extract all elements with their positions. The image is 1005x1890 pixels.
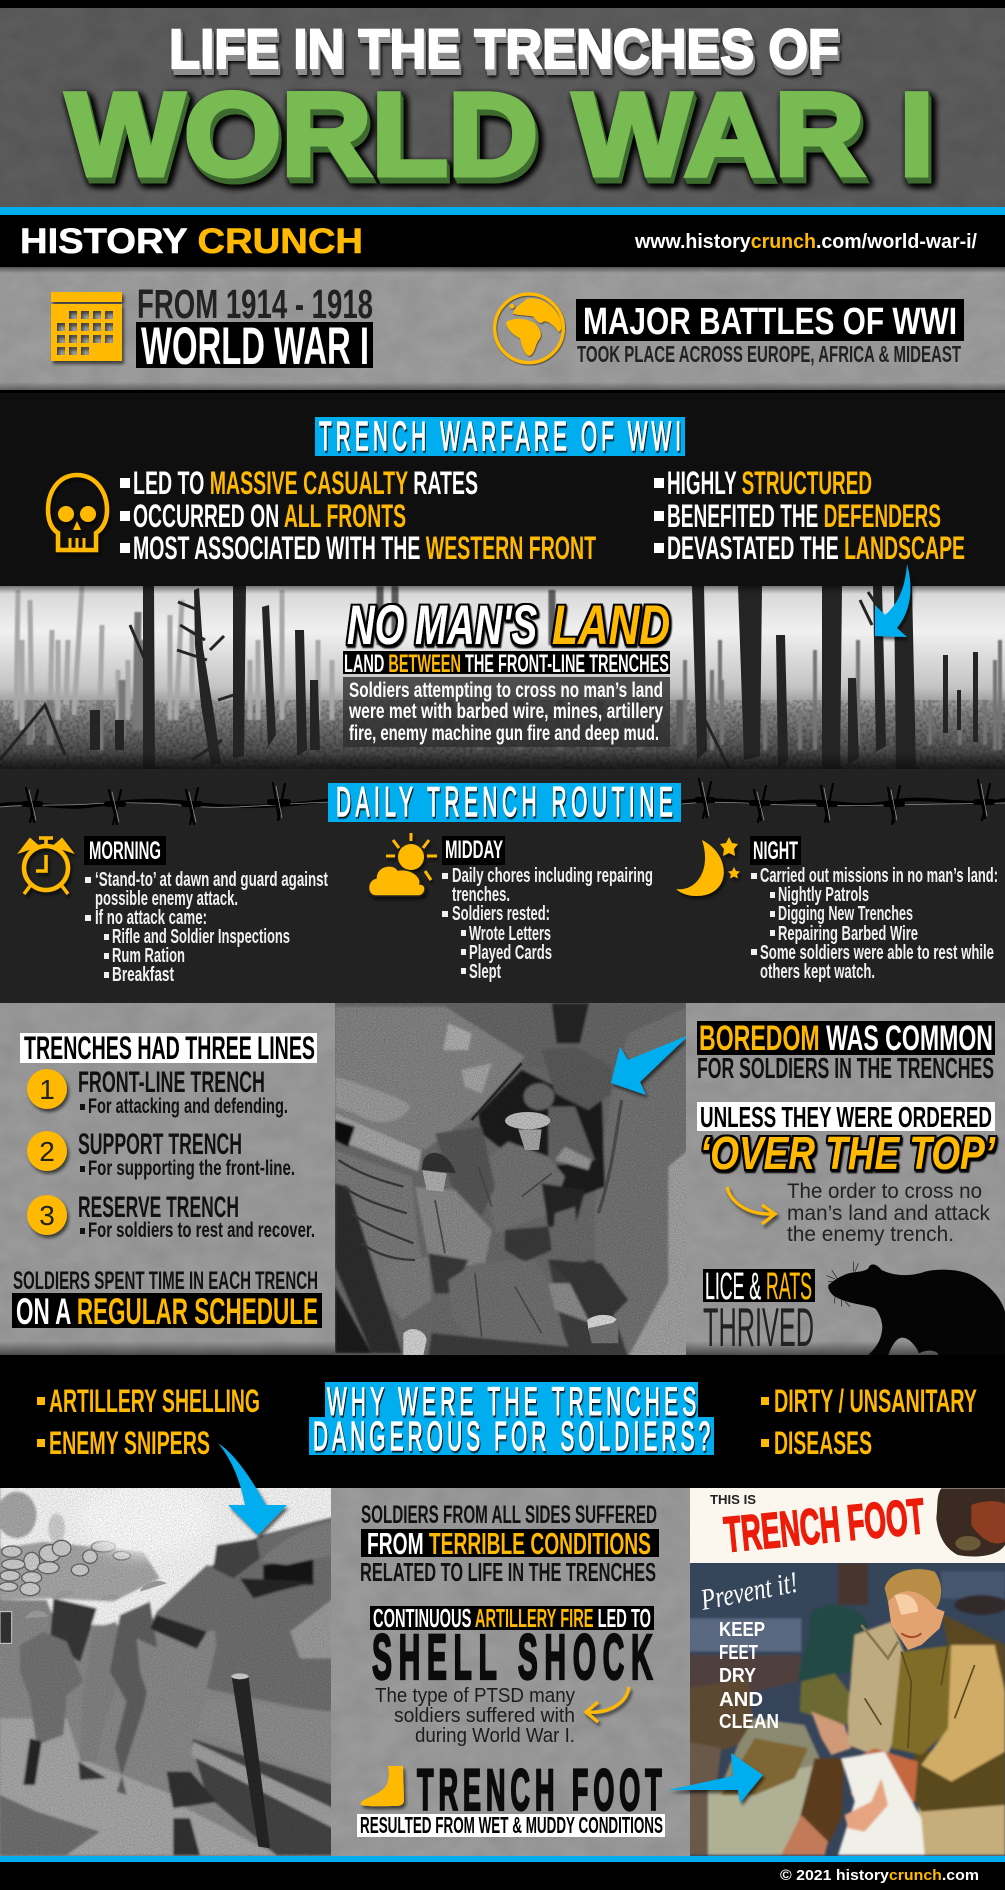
panel: daily trench routine [0,769,1005,1003]
list: Played Cards [469,942,552,964]
brand bar [0,215,1005,267]
panel: terrible conditions [331,1488,690,1856]
icon: calendar [51,292,122,361]
list: Digging New Trenches [778,903,913,925]
heading: DAILY TRENCH ROUTINE [336,778,673,825]
title: NO MAN'S [347,593,537,656]
item 2: For supporting the front-line. [88,1157,295,1180]
arrow: to soldiers in trench [611,1035,689,1095]
artillery label: CONTINUOUS ARTILLERY FIRE LED TO [373,1603,651,1633]
poster header: THIS IS [710,1492,756,1507]
photo: soldiers resting in trench [335,1000,690,1357]
item 2 [27,1128,295,1180]
right list: DISEASES [774,1425,872,1461]
list [751,865,998,983]
item 3: For soldiers to rest and recover. [88,1219,315,1242]
description: fire, enemy machine gun fire and deep mud. [349,722,659,745]
lice and rats label [703,1266,815,1308]
slogan list: CLEAN [719,1711,779,1733]
shell shock definition: The type of PTSD many [375,1685,575,1707]
schedule label [12,1291,322,1332]
panel: dates and battles [0,267,1005,393]
icon: alarm clock [20,838,72,894]
left list [37,1383,260,1461]
header panel [0,8,1005,215]
list: Rum Ration [112,945,185,967]
copyright: © 2021 history crunch.com [780,1867,979,1884]
arrow: yellow to definition [586,1687,629,1722]
left list: ARTILLERY SHELLING [49,1383,260,1419]
label: MORNING [89,837,161,865]
title line 1: LIFE IN THE TRENCHES OF [169,17,839,80]
schedule label: ON A REGULAR SCHEDULE [16,1291,318,1332]
date text: FROM 1914 - 1918 [137,281,373,327]
panel: three trench lines [0,1003,335,1355]
label [84,836,166,865]
list: others kept watch. [760,961,875,983]
list: Wrote Letters [469,923,551,945]
slogan list: FEET [719,1642,758,1664]
logo: HISTORY CRUNCH [20,222,363,261]
arrow: to trench foot poster [668,1753,763,1803]
list: Rifle and Soldier Inspections [112,926,290,948]
slogan list: AND [719,1689,763,1711]
description: Soldiers attempting to cross no man’s land [349,679,663,702]
item 1: For attacking and defending. [88,1095,288,1118]
heading: WHY WERE THE TRENCHES [327,1379,696,1424]
panel: boredom and lice [686,1003,1005,1358]
subtitle [343,650,670,678]
slogan script: Prevent it! [697,1566,801,1617]
shell shock definition: soldiers suffered with [394,1705,575,1727]
conditions outro: RELATED TO LIFE IN THE TRENCHES [360,1557,656,1587]
title: LAND [552,593,670,656]
label [750,836,801,865]
heading: DANGEROUS FOR SOLDIERS? [313,1414,710,1459]
slogan list [719,1619,779,1733]
heading: TRENCHES HAD THREE LINES [24,1030,315,1066]
slogan list: KEEP [719,1619,765,1641]
schedule note: SOLDIERS SPENT TIME IN EACH TRENCH [13,1267,318,1295]
item 3 [27,1191,315,1242]
website url: www.historycrunch.com/world-war-i/ [634,231,977,253]
item 2: SUPPORT TRENCH [78,1128,242,1161]
left list: ENEMY SNIPERS [49,1425,210,1461]
label: NIGHT [753,837,798,865]
title line 2: WORLD WAR I [66,69,934,201]
panel: boredom and lice: THRIVED [703,1296,814,1358]
description [343,677,670,747]
over the top definition: the enemy trench. [787,1223,954,1246]
right bullet list: HIGHLY STRUCTURED [667,465,872,501]
list: Repairing Barbed Wire [778,923,918,945]
item 2: 2 [39,1136,55,1167]
arrow: to enemy snipers photo [218,1443,287,1535]
column: morning [20,836,328,986]
poster: trench foot [688,1488,1005,1856]
item 1: 1 [39,1074,55,1105]
column: midday [368,833,653,983]
panel: no man's land [0,564,1005,770]
heading [309,1379,714,1459]
list: Slept [469,961,501,983]
item 3: 3 [39,1200,55,1231]
icon: skull [48,475,107,550]
over the top definition: man’s land and attack [787,1202,990,1225]
list: Daily chores including repairing [452,865,653,887]
list: Soldiers rested: [452,903,550,925]
panel: trench warfare [0,393,1005,586]
description: were met with barbed wire, mines, artillery [348,700,663,723]
conditions label: FROM TERRIBLE CONDITIONS [367,1526,651,1561]
right list [761,1383,977,1461]
shell shock definition [375,1685,575,1747]
list [442,865,653,983]
trench foot: TRENCH FOOT [417,1758,662,1823]
panel: why dangerous [0,1355,1005,1488]
left bullet list: LED TO MASSIVE CASUALTY RATES [133,465,478,501]
subtitle: LAND BETWEEN THE FRONT-LINE TRENCHES [344,650,669,678]
list: trenches. [452,884,510,906]
shell shock definition: during World War I. [415,1725,575,1747]
arrow: to no man's land [875,564,910,637]
icon: rat silhouette [827,1262,1005,1355]
poster painting [688,1563,1005,1856]
footer [0,1856,1005,1890]
conditions label [361,1526,659,1561]
over the top definition [787,1180,990,1246]
barbed wire [0,779,1005,824]
label [442,836,505,865]
photo: shattered forest [0,586,1005,770]
list: possible enemy attack. [95,888,238,910]
label: MIDDAY [445,836,503,864]
right bullet list [654,465,965,566]
slogan list: DRY [719,1665,757,1687]
list: Nightly Patrols [778,884,869,906]
list: If no attack came: [95,907,207,929]
arrow: yellow curved [727,1187,775,1224]
conditions intro: SOLDIERS FROM ALL SIDES SUFFERED [361,1501,657,1529]
list [85,869,328,986]
world war i label: WORLD WAR I [141,317,369,376]
trench foot cause [357,1812,665,1838]
over the top definition: The order to cross no [787,1180,982,1203]
world war i label [136,317,373,376]
icon: moon and stars [676,837,740,896]
left bullet list: MOST ASSOCIATED WITH THE WESTERN FRONT [133,530,596,566]
icon: globe [495,294,563,363]
column: night [676,836,998,983]
item 1: FRONT-LINE TRENCH [78,1066,265,1099]
icon: sun and cloud [368,833,437,896]
heading [20,1030,317,1066]
lice and rats label: LICE & RATS [705,1266,812,1308]
shell shock: SHELL SHOCK [372,1621,653,1693]
item 1 [27,1066,288,1118]
photo: soldiers firing from trench [0,1482,335,1860]
trench foot cause: RESULTED FROM WET & MUDDY CONDITIONS [360,1812,663,1838]
icon: foot [361,1766,404,1806]
item 3: RESERVE TRENCH [78,1191,239,1224]
list: Breakfast [112,964,174,986]
left bullet list: OCCURRED ON ALL FRONTS [133,498,406,534]
list: ‘Stand-to’ at dawn and guard against [95,869,328,891]
left bullet list [120,465,596,566]
heading: TRENCH WARFARE OF WWI [319,413,681,459]
